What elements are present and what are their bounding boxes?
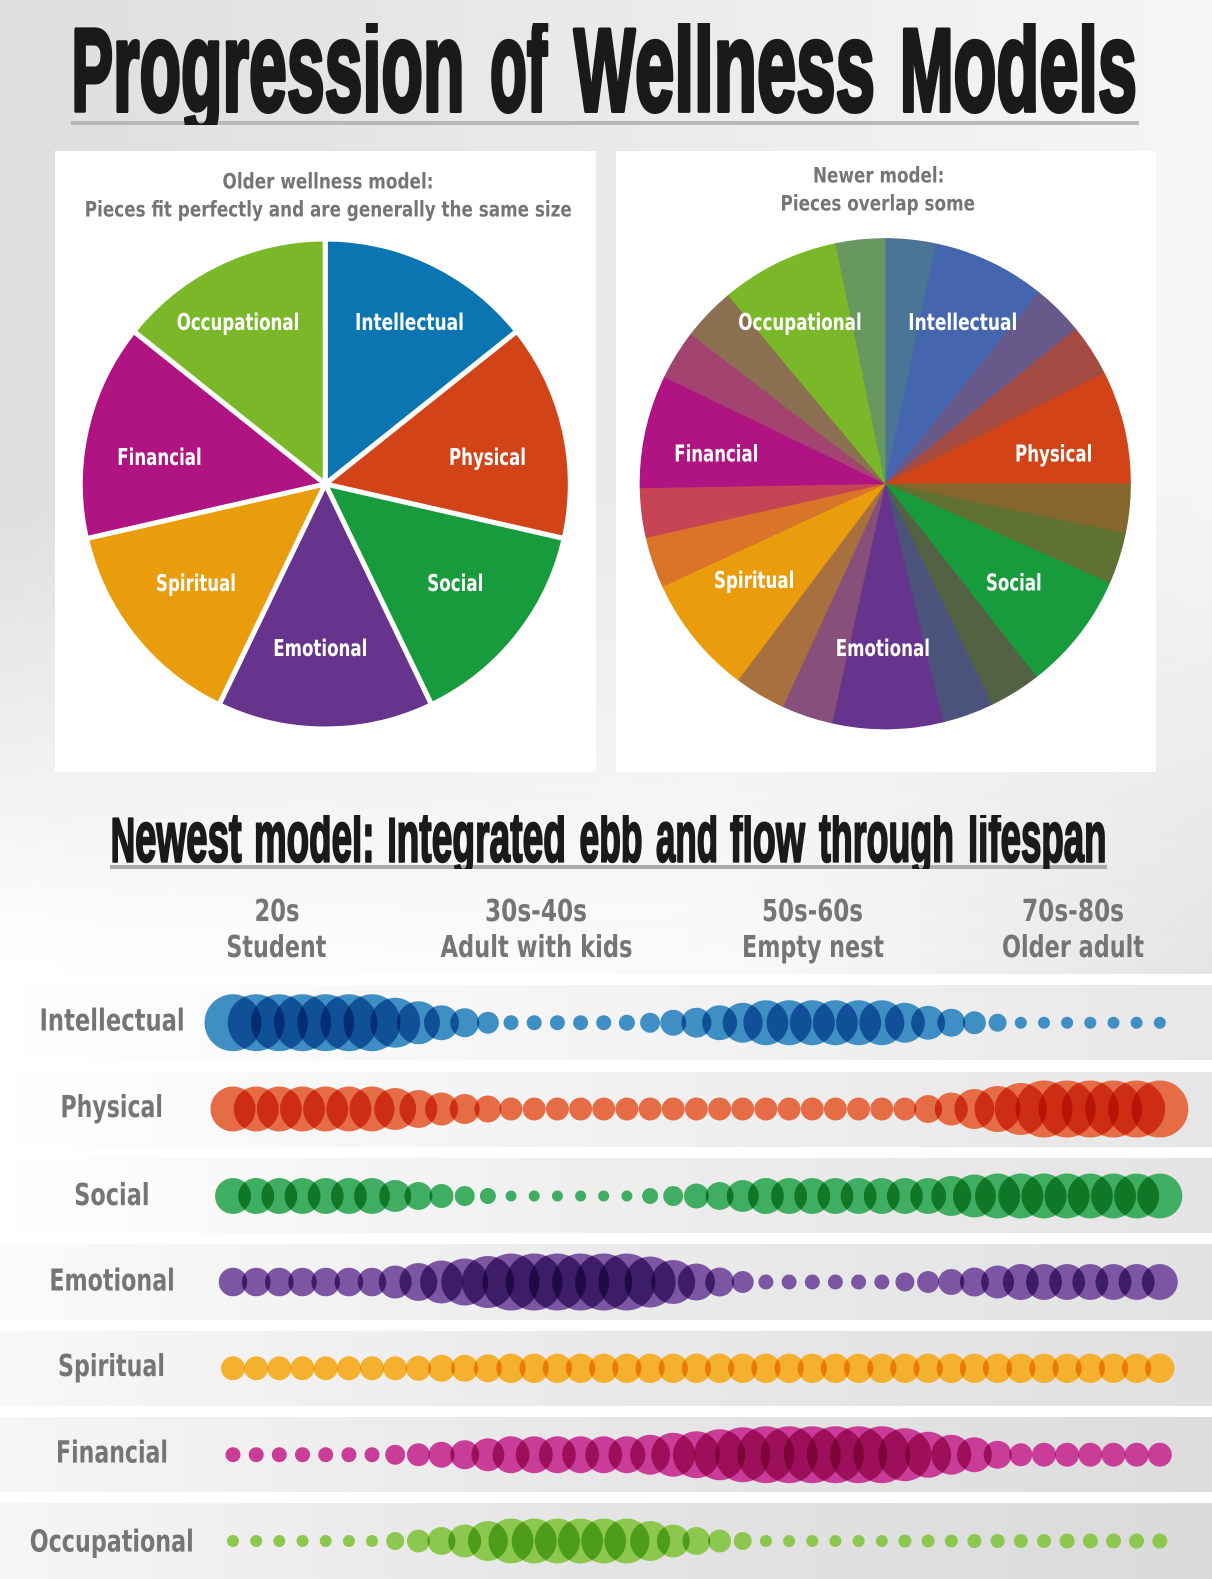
life stage: 20s student: Student [226, 930, 326, 965]
row: social: Social [74, 1178, 150, 1213]
pie chart: overlapping pieces: Occupational [738, 310, 862, 336]
pie chart: overlapping pieces: Emotional [836, 636, 930, 662]
panel heading: newer model [780, 164, 975, 216]
pie chart: overlapping pieces: Financial [674, 442, 758, 468]
life stage: 70s-80s older adult [1002, 894, 1144, 965]
pie chart: seven equal pieces: Financial [117, 445, 202, 471]
row: intellectual: Intellectual [40, 1004, 185, 1039]
pie chart: seven equal pieces: Social [427, 571, 483, 597]
bubble series: social [215, 1174, 1182, 1218]
pie chart: seven equal pieces: Physical [449, 445, 526, 471]
panel heading: newer model: Pieces overlap some [780, 192, 975, 216]
bubble series: physical [210, 1080, 1188, 1138]
pie chart: seven equal pieces: Intellectual [355, 310, 464, 336]
life stage: 20s student: 20s [254, 894, 300, 929]
section heading: newest model: flow [730, 799, 805, 878]
section heading: newest model: model: [254, 799, 374, 878]
row: physical: Physical [60, 1090, 163, 1125]
pie chart: seven equal pieces: Occupational [177, 310, 299, 336]
bubble series: spiritual [221, 1354, 1175, 1383]
row: emotional [0, 1244, 1212, 1320]
life stage: 70s-80s older adult: Older adult [1002, 930, 1144, 965]
row: spiritual: Spiritual [58, 1349, 165, 1384]
section heading: newest model [110, 815, 1107, 869]
section heading: newest model: and [656, 799, 718, 878]
row: emotional: Emotional [49, 1264, 175, 1299]
life stage: 30s-40s adult with kids: Adult with kids [440, 930, 632, 965]
pie chart: overlapping pieces [640, 238, 1131, 729]
bubble series: financial [226, 1426, 1172, 1483]
pie chart: overlapping pieces: Spiritual [714, 568, 794, 594]
panel heading: older model: Older wellness model: [222, 170, 434, 194]
title [71, 23, 1139, 125]
row: occupational: Occupational [30, 1525, 194, 1560]
section heading: newest model: Integrated [388, 799, 566, 878]
row: financial [0, 1417, 1212, 1492]
pie chart: overlapping pieces: Intellectual [908, 310, 1017, 336]
life stage: 50s-60s empty nest [742, 894, 884, 965]
pie chart: seven equal pieces: Spiritual [156, 571, 236, 597]
panel heading: newer model: Newer model: [813, 164, 944, 188]
pie chart: seven equal pieces [44, 182, 636, 788]
pie chart: overlapping pieces: Physical [1015, 442, 1092, 468]
bubble series: emotional [219, 1254, 1178, 1310]
panel heading: older model: Pieces fit perfectly and are generally the same size [85, 198, 572, 222]
bubble series: intellectual [204, 994, 1166, 1051]
row: physical [0, 1072, 1212, 1147]
section heading: newest model: through [819, 799, 954, 878]
row: intellectual [0, 985, 1212, 1060]
page background [0, 0, 1212, 974]
life stage: 30s-40s adult with kids [440, 894, 632, 965]
bubble series: occupational [227, 1518, 1167, 1564]
section heading: newest model: ebb [580, 799, 642, 878]
life stage: 30s-40s adult with kids: 30s-40s [485, 894, 587, 929]
panel: newer model [616, 151, 1156, 772]
life stage: 50s-60s empty nest: Empty nest [742, 930, 884, 965]
row: spiritual [0, 1331, 1212, 1406]
panel: older wellness model [44, 151, 636, 788]
section heading: newest model: Newest [111, 799, 242, 878]
pie chart: seven equal pieces: Emotional [273, 636, 367, 662]
panel heading: older model [85, 170, 572, 222]
row: social [0, 1158, 1212, 1233]
row: occupational [0, 1503, 1212, 1579]
life stage: 20s student [226, 894, 326, 965]
pie chart: overlapping pieces: Social [986, 571, 1042, 597]
row: financial: Financial [56, 1436, 168, 1471]
life stage: 70s-80s older adult: 70s-80s [1022, 894, 1124, 929]
life stage: 50s-60s empty nest: 50s-60s [762, 894, 863, 929]
